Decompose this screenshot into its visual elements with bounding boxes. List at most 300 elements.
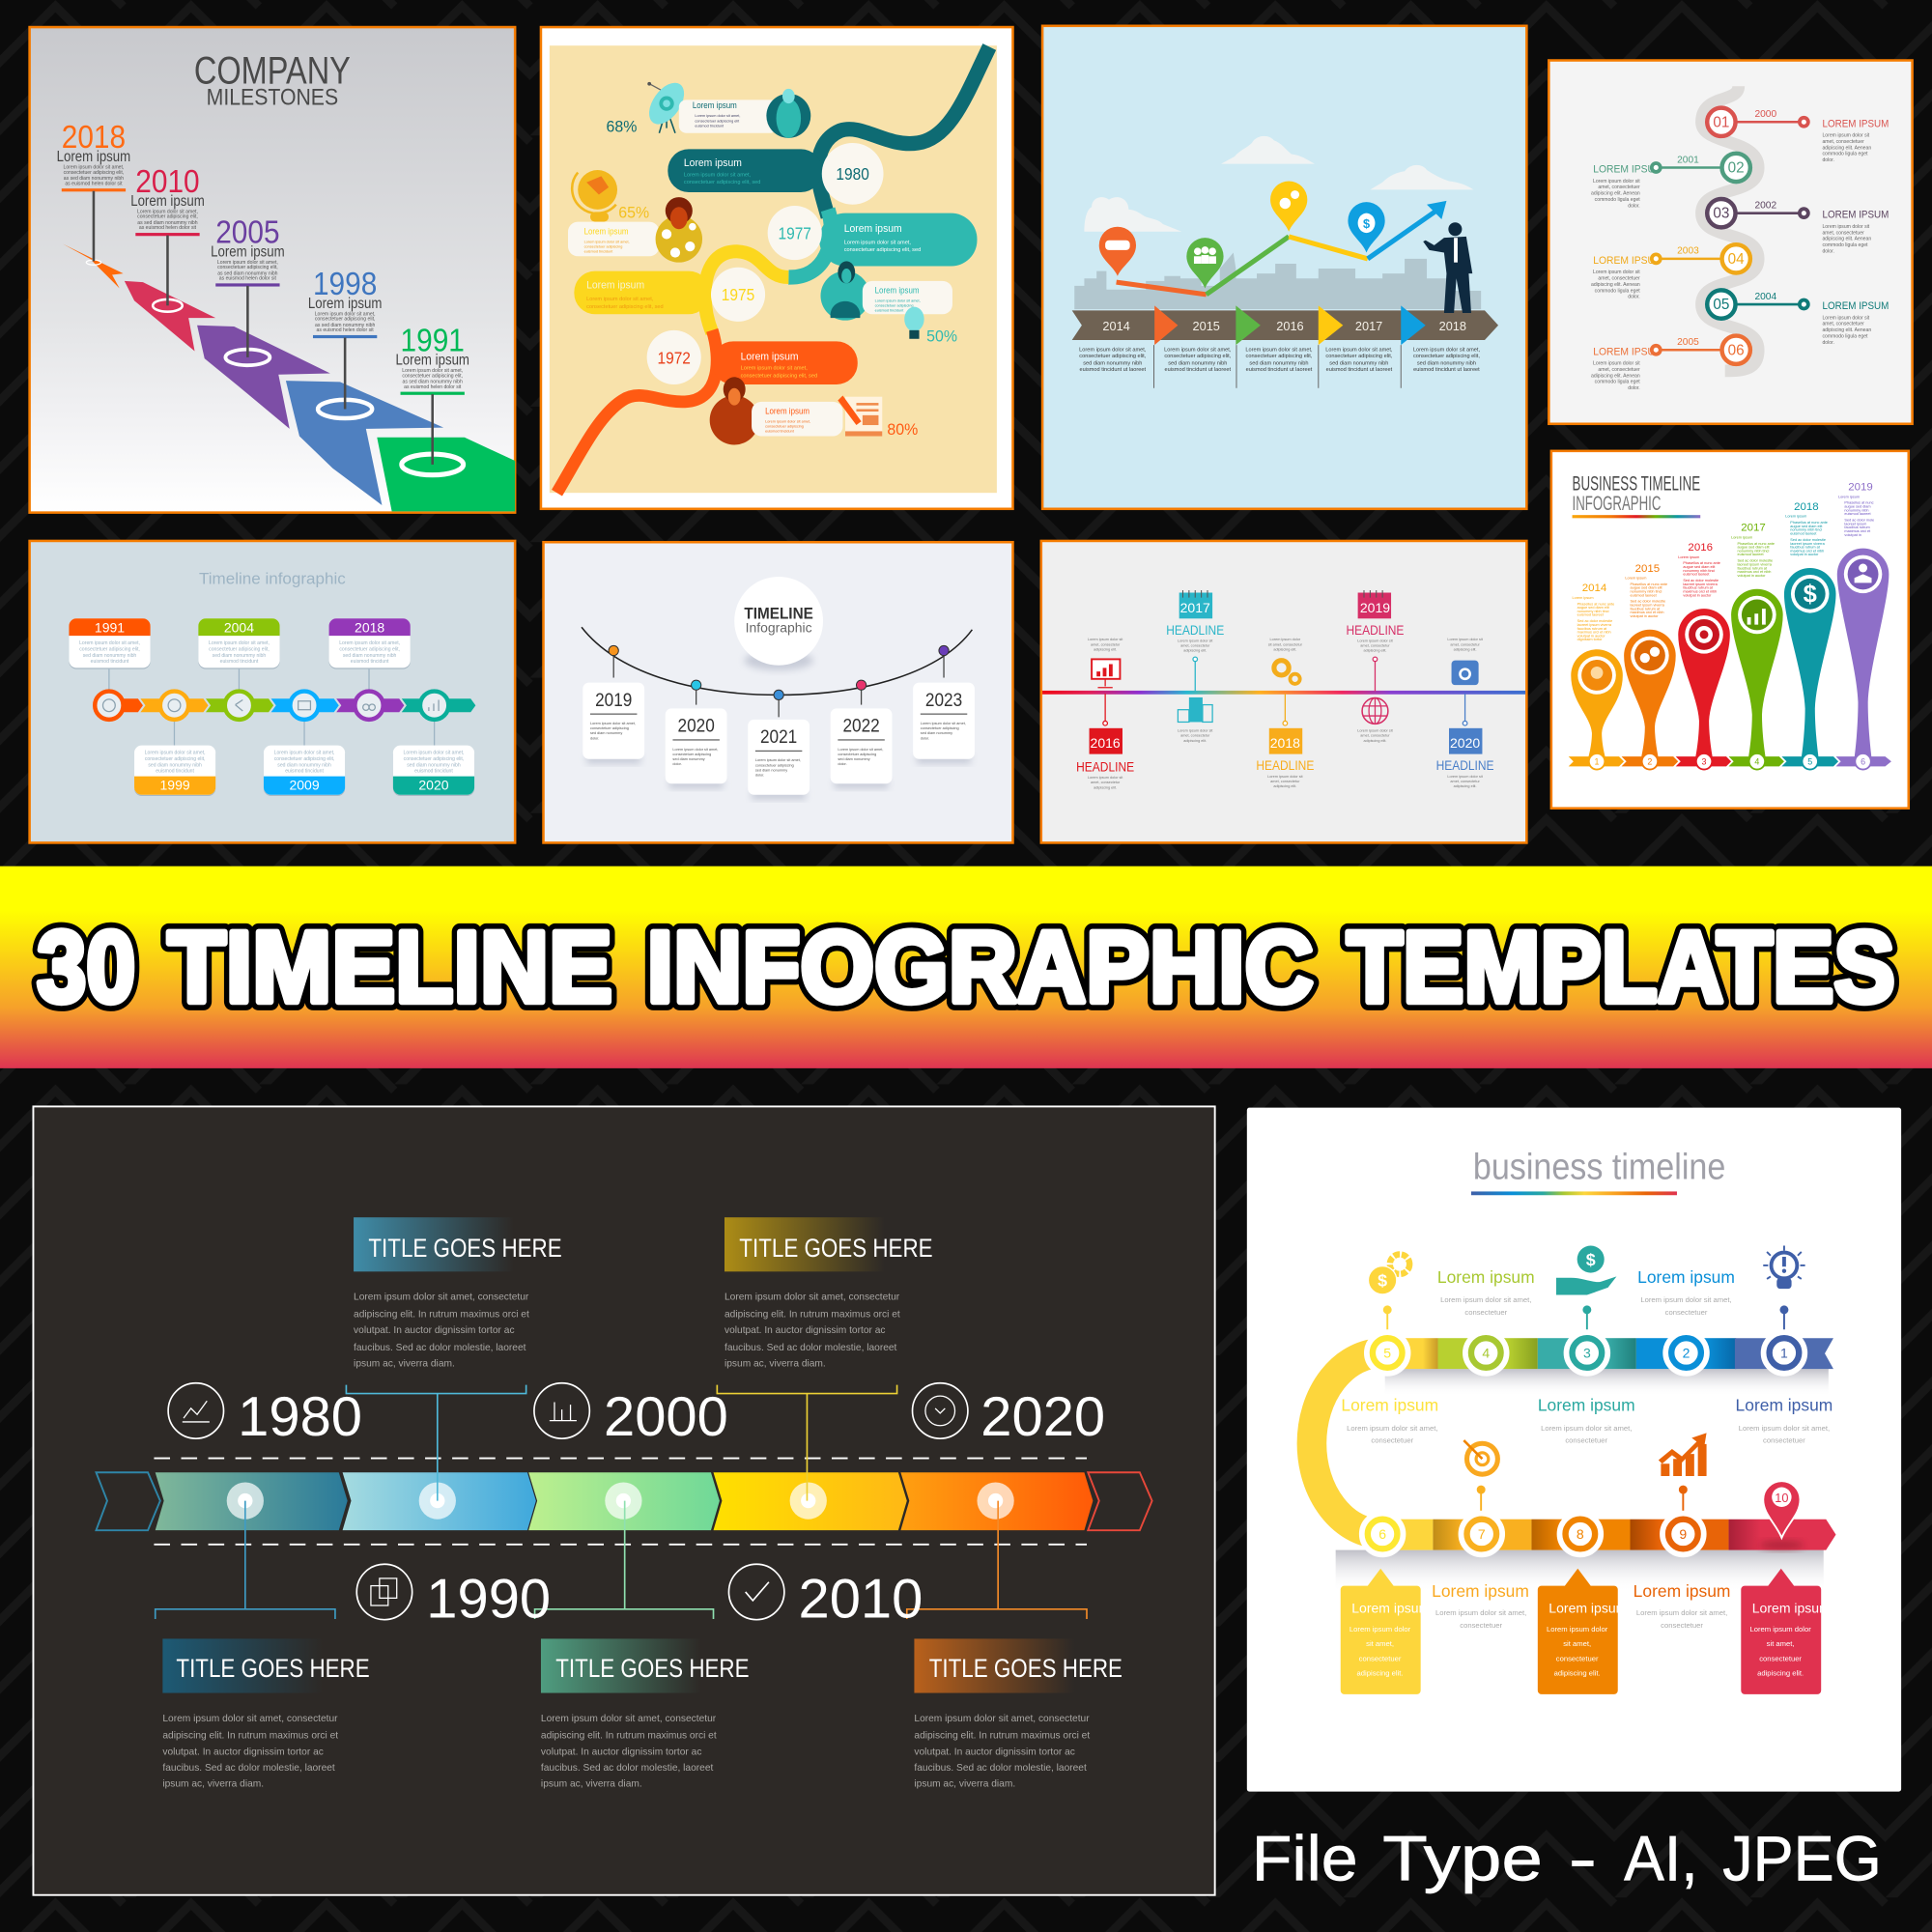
- block: title 3: volutpat. In auctor dignissim tortor ac: [162, 1747, 324, 1757]
- callout 68% satellite: consectetuer adipiscing elit: [695, 119, 740, 123]
- callout 50% bulb: [820, 261, 957, 345]
- column text: euismod tincidunt ut laoreet: [1326, 367, 1393, 373]
- label 3: Lorem ipsum dolor sit amet,: [1541, 1424, 1632, 1433]
- drop 2014: faucibus rutrum at: [1577, 627, 1607, 631]
- heading: [1573, 471, 1700, 518]
- bar 1972: Lorem ipsum: [741, 351, 799, 362]
- item 2020: adipiscing elit.: [1454, 784, 1477, 788]
- milestone 2010: consectetuer adipiscing elit,: [137, 214, 198, 220]
- drop 2019: augue sed diam: [1844, 505, 1871, 509]
- milestone 1991: Lorem ipsum: [395, 353, 469, 369]
- drop 2016: 2016: [1688, 542, 1713, 554]
- milestone 2005: [211, 214, 285, 357]
- title circle: TIMELINE: [744, 604, 813, 622]
- card 2022: consectetuer adipiscing: [838, 753, 876, 756]
- drop 2014: augue sed diam elit: [1577, 606, 1610, 610]
- label 7: Lorem ipsum dolor sit amet,: [1435, 1608, 1526, 1617]
- title text: INFOGRAPHIC: [647, 911, 1314, 1024]
- milestone 2010: 2010: [135, 164, 200, 200]
- callout 65% globe: Lorem ipsum dolor sit amet,: [584, 240, 630, 243]
- card 1991: consectetuer adipiscing elit,: [79, 646, 140, 652]
- file type caption: JPEG: [1722, 1823, 1882, 1894]
- box 6: sit amet,: [1366, 1639, 1394, 1648]
- milestone 2005: as sed diam nonummy nibh: [217, 270, 278, 276]
- label 4: [1437, 1267, 1535, 1317]
- callout 80% report: euismod tincidunt: [765, 430, 795, 434]
- column text: euismod tincidunt ut laoreet: [1164, 367, 1232, 373]
- milestone 2005: Lorem ipsum: [211, 243, 285, 260]
- drop 2017: maximus orci et nibh: [1737, 570, 1771, 574]
- card 1999: 1999: [160, 778, 190, 793]
- item 2019: HEADLINE: [1346, 623, 1405, 638]
- step 04: 2003: [1677, 246, 1699, 257]
- item 2017: HEADLINE: [1166, 623, 1224, 638]
- column text: Lorem ipsum dolor sit amet,: [1245, 348, 1313, 354]
- numbered ribbon: 5: [1807, 756, 1812, 766]
- item 2020: HEADLINE: [1436, 758, 1494, 773]
- winding road: [557, 46, 989, 493]
- drop 2018: Sed ac dolor molestie: [1790, 538, 1826, 542]
- callout 80% report: [710, 377, 918, 444]
- drop 2018: augue sed diam elit: [1790, 525, 1823, 528]
- callout 68% satellite: euismod tincidunt: [695, 124, 724, 128]
- column text: Lorem ipsum dolor sit amet,: [1325, 348, 1393, 354]
- node icons: [95, 692, 448, 720]
- step 05: commodo ligula eget: [1822, 333, 1868, 339]
- block: title 1: Lorem ipsum dolor sit amet, consectetur: [354, 1293, 529, 1303]
- label 5: Lorem ipsum: [1341, 1395, 1438, 1414]
- step 01: LOREM IPSUM: [1822, 118, 1889, 129]
- column text: euismod tincidunt ut laoreet: [1246, 367, 1313, 373]
- step 04: adipiscing elit. Aenean: [1591, 282, 1640, 288]
- step 01: adipiscing elit. Aenean: [1822, 145, 1871, 151]
- drop 2015: 2015: [1635, 563, 1660, 575]
- card 2020: 2020: [418, 778, 449, 793]
- item 2020: Lorem ipsum dolor sit: [1447, 638, 1484, 641]
- card 2023: sed diam nonummy: [921, 731, 952, 735]
- hanging string: [582, 627, 972, 695]
- step 02: commodo ligula eget: [1595, 197, 1640, 203]
- bar 1972: Lorem ipsum dolor sit amet,: [741, 366, 808, 372]
- icon: idea bulb: [1763, 1246, 1805, 1289]
- drop 2018: Lorem ipsum: [1785, 515, 1806, 519]
- label 9: Lorem ipsum dolor sit amet,: [1636, 1608, 1727, 1617]
- numbered nodes top: 2: [1683, 1346, 1690, 1361]
- drop 2015: Sed ac dolor molestie: [1631, 600, 1665, 604]
- item 2020: amet, consectetur: [1450, 642, 1480, 646]
- card 2020: sed diam nonummy: [672, 757, 705, 761]
- callout 80% report: Lorem ipsum dolor sit amet,: [765, 419, 810, 423]
- card 1991: Lorem ipsum dolor sit amet,: [79, 640, 140, 646]
- label 4: consectetuer: [1464, 1308, 1508, 1317]
- icon: hand with dollar: [1556, 1246, 1616, 1295]
- card 1999: consectetuer adipiscing elit,: [145, 756, 205, 762]
- step 04: amet, consectetuer: [1598, 276, 1640, 282]
- block: title 2: TITLE GOES HERE: [739, 1234, 933, 1263]
- card 2020: 2020: [678, 717, 715, 737]
- block: title 2: [724, 1217, 933, 1370]
- column text: euismod tincidunt ut laoreet: [1413, 367, 1480, 373]
- title text: TIMELINE: [167, 911, 612, 1024]
- card 2021: Lorem ipsum dolor sit amet,: [755, 758, 801, 762]
- drop 2014: Phasellus at nunc ante: [1577, 602, 1614, 606]
- block: title 4: Lorem ipsum dolor sit amet, consectetur: [541, 1714, 717, 1724]
- numbered ribbon: 3: [1702, 756, 1707, 766]
- card 2020: Lorem ipsum dolor sit amet,: [672, 748, 718, 752]
- item 2018: Lorem ipsum dolor: [1270, 638, 1301, 641]
- block: title 1: faucibus. Sed ac dolor molestie, laoreet: [354, 1343, 526, 1353]
- year ribbon: 2014: [1102, 319, 1130, 333]
- label 2: Lorem ipsum dolor sit amet,: [1640, 1295, 1732, 1304]
- card 1991: sed diam nonummy nibh: [83, 653, 136, 659]
- box 6: Lorem ipsum dolor: [1350, 1625, 1411, 1634]
- item 2018: sit amet, consectetur: [1268, 642, 1303, 646]
- year 1980: [168, 1383, 362, 1448]
- card 1991: 1991: [95, 619, 125, 635]
- heading: BUSINESS TIMELINE: [1573, 471, 1700, 496]
- label 9: Lorem ipsum: [1634, 1581, 1730, 1601]
- milestone 2018: as sed diam nonummy nibh: [64, 176, 124, 182]
- icon: globe: amet, consectetur: [1360, 734, 1390, 738]
- milestone 2005: as euismod helen dolor sit: [219, 276, 277, 282]
- label 9: [1634, 1581, 1730, 1630]
- drop 2016: Phasellus at nunc ante: [1683, 561, 1720, 565]
- milestone 2018: [57, 120, 130, 261]
- callout 50% bulb: consectetuer adipiscing: [875, 304, 913, 308]
- item 2020: Lorem ipsum dolor sit: [1447, 775, 1484, 779]
- numbered nodes top: 4: [1482, 1346, 1490, 1361]
- label 9: consectetuer: [1661, 1621, 1703, 1630]
- card 1999: sed diam nonummy nibh: [148, 762, 202, 768]
- card 2009: euismod tincidunt: [285, 769, 324, 775]
- panel: dark chevron timeline: [33, 1106, 1215, 1895]
- label 3: [1538, 1395, 1635, 1445]
- milestone 1998: as euismod helen dolor sit: [317, 327, 374, 333]
- year ribbon: [1072, 305, 1498, 345]
- card 2022: [831, 680, 892, 788]
- drop 2017: laoreet ipsum viverra: [1737, 562, 1773, 566]
- year ribbon: 2015: [1193, 319, 1220, 333]
- label 7: Lorem ipsum: [1432, 1581, 1529, 1601]
- drop 2019: laoreet ipsum: [1844, 522, 1866, 526]
- step 03: 03: [1713, 206, 1729, 222]
- numbered nodes bottom: [1360, 1512, 1705, 1556]
- block: title 5: ipsum ac, viverra diam.: [914, 1778, 1015, 1789]
- title banner: [0, 867, 1932, 1068]
- panel: business timeline ribbon: [1247, 1108, 1901, 1792]
- card 2020: euismod tincidunt: [414, 769, 453, 775]
- drop 2017: nonummy nibh tinci: [1737, 549, 1769, 553]
- block: title 2: volutpat. In auctor dignissim tortor ac: [724, 1325, 885, 1336]
- bar 1975: Lorem ipsum dolor sit amet,: [586, 297, 654, 302]
- column text: Lorem ipsum dolor sit amet,: [1079, 348, 1147, 354]
- step 02: 2001: [1677, 155, 1699, 165]
- drop 2019: nonummy nibh: [1844, 508, 1868, 512]
- step 03: LOREM IPSUM: [1822, 210, 1889, 221]
- heading: Timeline infographic: [199, 570, 346, 588]
- item 2016: Lorem ipsum dolor sit: [1088, 776, 1123, 780]
- step 06: [1591, 336, 1750, 391]
- card 2023: [913, 645, 975, 764]
- year 2020: [913, 1383, 1105, 1448]
- step 04: [1591, 244, 1750, 300]
- card 1991: euismod tincidunt: [91, 659, 129, 665]
- block: title 5: volutpat. In auctor dignissim tortor ac: [914, 1747, 1075, 1757]
- step 05: LOREM IPSUM: [1822, 300, 1889, 312]
- drop 2017: euismod laoreet: [1737, 553, 1765, 556]
- icon: buildings: Lorem ipsum dolor sit: [1178, 729, 1213, 733]
- milestone 1998: Lorem ipsum: [308, 296, 382, 312]
- label 1: Lorem ipsum dolor sit amet,: [1739, 1424, 1830, 1433]
- numbered nodes top: [1365, 1331, 1806, 1375]
- item 2020: 2020: [1450, 735, 1480, 751]
- icon: gear and dollar: [1368, 1254, 1409, 1294]
- callout 80% report: consectetuer adipiscing: [765, 425, 804, 429]
- step 02: [1591, 154, 1750, 209]
- block: title 5: TITLE GOES HERE: [929, 1654, 1122, 1683]
- item 2018: Lorem ipsum dolor sit: [1267, 775, 1304, 779]
- pin: handshake: [1099, 227, 1136, 276]
- milestone 2018: 2018: [62, 120, 126, 156]
- title text: 30: [37, 911, 135, 1024]
- milestone 1991: [395, 324, 469, 465]
- step 06: LOREM IPSU: [1593, 346, 1655, 357]
- drop 2018: maximus orci et nibh: [1790, 549, 1824, 553]
- panel: timeline infographic cards: [30, 541, 515, 842]
- drop 2016: nonummy nibh tinci: [1683, 569, 1715, 573]
- callout 65% globe: euismod tincidunt: [584, 249, 613, 253]
- title circle: [734, 577, 823, 670]
- drop 2019: [1837, 482, 1889, 757]
- year 1990: 1990: [426, 1569, 551, 1631]
- card 2009: consectetuer adipiscing elit,: [274, 756, 334, 762]
- item 2018: amet, consectetur: [1270, 780, 1300, 783]
- dashed guides: [154, 1459, 1087, 1545]
- step 04: commodo ligula eget: [1595, 288, 1640, 294]
- drop 2015: volutpat in auctor: [1631, 614, 1659, 618]
- icon: globe: adipiscing elit.: [1363, 739, 1386, 743]
- block: title 2: adipiscing elit. In rutrum maximus orci et: [724, 1310, 900, 1321]
- drop 2017: Lorem ipsum: [1731, 535, 1752, 539]
- heading: INFOGRAPHIC: [1573, 491, 1661, 515]
- numbered nodes bottom: 7: [1478, 1526, 1486, 1542]
- column text: euismod tincidunt ut laoreet: [1079, 367, 1147, 373]
- year ribbon: 2017: [1355, 319, 1382, 333]
- step 06: Lorem ipsum dolor sit: [1593, 361, 1640, 367]
- heading: business timeline: [1473, 1147, 1725, 1188]
- label 2: [1637, 1267, 1735, 1317]
- box 8: sit amet,: [1563, 1639, 1591, 1648]
- drop 2019: 2019: [1848, 482, 1873, 494]
- milestone 2010: [130, 164, 205, 305]
- drop 2014: [1571, 582, 1623, 757]
- block: title 4: adipiscing elit. In rutrum maximus orci et: [541, 1731, 717, 1742]
- bar 1977: consectetuer adipiscing elit, sed: [844, 247, 921, 253]
- item 2018: adipiscing elit.: [1273, 784, 1296, 788]
- bar 1980: 1980: [836, 164, 869, 184]
- file type caption: File: [1252, 1823, 1358, 1894]
- step 05: adipiscing elit. Aenean: [1822, 327, 1871, 333]
- numbered nodes top: 3: [1583, 1346, 1591, 1361]
- column text: sed diam nonummy nibh: [1168, 361, 1227, 367]
- card 2022: Lorem ipsum dolor sit amet,: [838, 748, 883, 752]
- drop 2018: laoreet ipsum viverra: [1790, 542, 1826, 546]
- item 2019: [1346, 590, 1405, 692]
- card 2023: Lorem ipsum dolor sit amet,: [921, 722, 966, 725]
- card 1999: Lorem ipsum dolor sit amet,: [145, 751, 206, 756]
- drop 2015: Lorem ipsum: [1625, 576, 1646, 580]
- file type caption: [1252, 1823, 1882, 1894]
- numbered nodes bottom: 6: [1378, 1526, 1386, 1542]
- column text: consectetuer adipiscing elit,: [1246, 354, 1313, 359]
- callout 65% globe: 65%: [618, 204, 649, 222]
- year 1990: [356, 1564, 551, 1631]
- milestone 1991: consectetuer adipiscing elit,: [402, 373, 463, 379]
- title: company milestones: MILESTONES: [207, 84, 338, 110]
- milestone 1998: consectetuer adipiscing elit,: [315, 317, 375, 323]
- milestone 1998: as sed diam nonummy nibh: [315, 323, 375, 328]
- bar 1975: Lorem ipsum: [586, 279, 644, 291]
- milestone 2018: consectetuer adipiscing elit,: [64, 170, 124, 176]
- drop 2017: [1731, 523, 1783, 757]
- year 2000: 2000: [604, 1386, 728, 1448]
- numbered ribbon: [1569, 753, 1891, 770]
- clouds: [1084, 136, 1474, 232]
- block: title 4: TITLE GOES HERE: [555, 1654, 750, 1683]
- drop 2019: maximus orci et: [1844, 529, 1871, 533]
- card 2019: dolor.: [590, 736, 599, 740]
- curved connector: [1312, 1353, 1382, 1534]
- box 10: consectetuer: [1759, 1654, 1802, 1662]
- milestone 2018: Lorem ipsum: [57, 149, 130, 165]
- step 01: amet, consectetuer: [1822, 139, 1864, 145]
- block: title 5: adipiscing elit. In rutrum maximus orci et: [914, 1731, 1090, 1742]
- block: title 5: [914, 1638, 1122, 1789]
- icon: buildings: [1178, 697, 1213, 743]
- year 1980: 1980: [238, 1386, 362, 1448]
- year 2000: [534, 1383, 728, 1448]
- item 2017: [1166, 590, 1224, 692]
- callout 50% bulb: 50%: [926, 327, 957, 345]
- drop 2014: Lorem ipsum: [1573, 596, 1594, 600]
- step 02: dolor.: [1628, 203, 1640, 209]
- drop 2014: volutpat in auctor: [1577, 634, 1605, 638]
- card 2019: Lorem ipsum dolor sit amet,: [590, 722, 636, 725]
- bar 1980: Lorem ipsum: [684, 157, 742, 169]
- milestone 2010: as euismod helen dolor sit: [139, 225, 197, 231]
- file type caption: AI,: [1624, 1823, 1698, 1894]
- item 2016: 2016: [1091, 735, 1121, 751]
- drop 2014: maximus orci et nibh: [1577, 631, 1611, 635]
- card 2020: consectetuer adipiscing elit,: [404, 756, 464, 762]
- label 3: Lorem ipsum: [1538, 1395, 1635, 1414]
- milestone 2005: 2005: [215, 214, 280, 250]
- column text: sed diam nonummy nibh: [1249, 361, 1309, 367]
- chevron staircase: [63, 244, 515, 511]
- block: title 5: faucibus. Sed ac dolor molestie, laoreet: [914, 1763, 1087, 1774]
- milestone 1998: [308, 267, 382, 409]
- card 2019: consectetuer adipiscing: [590, 726, 629, 730]
- step 06: 2005: [1677, 337, 1699, 348]
- bottom ribbon: [1382, 1520, 1836, 1550]
- drop 2018: [1784, 501, 1836, 757]
- milestone 1991: as sed diam nonummy nibh: [403, 380, 463, 385]
- icon: growth chart: [1659, 1433, 1707, 1476]
- drop 2017: Sed ac dolor molestie: [1737, 559, 1773, 563]
- item 2016: amet, consectetur: [1091, 642, 1121, 646]
- item 2020: amet, consectetur: [1450, 780, 1480, 783]
- title text: 30: [37, 911, 135, 1024]
- column text: consectetuer adipiscing elit,: [1325, 354, 1393, 359]
- drop 2015: faucibus rutrum at: [1631, 607, 1661, 611]
- panel: winding road timeline: [541, 27, 1012, 509]
- panel: business timeline drops: [1551, 451, 1909, 809]
- icon: buildings: amet, consectetur: [1180, 734, 1210, 738]
- milestone 1991: as euismod helen dolor sit: [404, 384, 462, 390]
- callout 65% globe: [568, 170, 702, 263]
- block: title 3: [162, 1638, 370, 1789]
- card 1991: [69, 618, 151, 669]
- callout 50% bulb: Lorem ipsum: [875, 286, 920, 296]
- box 8: Lorem ipsum: [1548, 1601, 1627, 1616]
- card 2019: 2019: [595, 691, 632, 711]
- step 02: 02: [1728, 160, 1745, 177]
- bar 1977: Lorem ipsum: [844, 223, 902, 235]
- step 03: commodo ligula eget: [1822, 242, 1868, 248]
- item 2016: amet, consectetur: [1091, 781, 1121, 784]
- label 4: Lorem ipsum: [1437, 1267, 1535, 1287]
- milestone 2010: Lorem ipsum: [130, 193, 205, 210]
- milestone 1998: Lorem ipsum dolor sit amet,: [315, 312, 376, 318]
- item 2017: amet, consectetur: [1180, 644, 1210, 648]
- drop 2017: Phasellus at nunc ante: [1737, 542, 1775, 546]
- card 2023: 2023: [925, 691, 962, 711]
- drop 2018: faucibus rutrum at: [1790, 546, 1821, 550]
- bar 1980: [668, 143, 884, 205]
- milestone 1991: Lorem ipsum dolor sit amet,: [402, 368, 463, 374]
- pin 10: [1759, 1481, 1804, 1550]
- step 03: [1707, 199, 1889, 254]
- numbered nodes bottom: 8: [1577, 1526, 1584, 1542]
- drop 2019: Sed ac dolor mole: [1844, 519, 1874, 523]
- column text: Lorem ipsum dolor sit amet,: [1413, 348, 1480, 354]
- card 2020: sed diam nonummy nibh: [407, 762, 461, 768]
- column text: sed diam nonummy nibh: [1083, 361, 1142, 367]
- card 2004: 2004: [224, 619, 254, 635]
- drop 2015: [1624, 563, 1676, 757]
- block: title 3: faucibus. Sed ac dolor molestie, laoreet: [162, 1763, 335, 1774]
- item 2017: Lorem ipsum dolor sit: [1178, 639, 1213, 643]
- callout 68% satellite: Lorem ipsum: [693, 100, 737, 110]
- panel: headline rainbow timeline: [1041, 541, 1526, 842]
- callout 68% satellite: [607, 76, 810, 138]
- label 1: Lorem ipsum: [1736, 1395, 1833, 1414]
- icon: gear and dollar: $: [1378, 1271, 1387, 1291]
- card 2004: [198, 618, 280, 669]
- milestone 1991: 1991: [401, 324, 465, 359]
- drop 2018: 2018: [1794, 501, 1819, 513]
- drop 2018: nonummy nibh tinci: [1790, 528, 1822, 532]
- bar 1975: consectetuer adipiscing elit, sed: [586, 304, 664, 310]
- callout 68% satellite: Lorem ipsum dolor sit amet,: [695, 114, 740, 118]
- drop 2019: Lorem ipsum: [1838, 495, 1860, 498]
- step 04: LOREM IPSU: [1593, 255, 1655, 267]
- callout 65% globe: Lorem ipsum: [584, 226, 629, 236]
- column text: consectetuer adipiscing elit,: [1079, 354, 1147, 359]
- panel: skyline growth timeline: [1042, 26, 1526, 509]
- drop 2016: volutpat in auctor: [1683, 593, 1712, 597]
- box 10: [1741, 1569, 1831, 1694]
